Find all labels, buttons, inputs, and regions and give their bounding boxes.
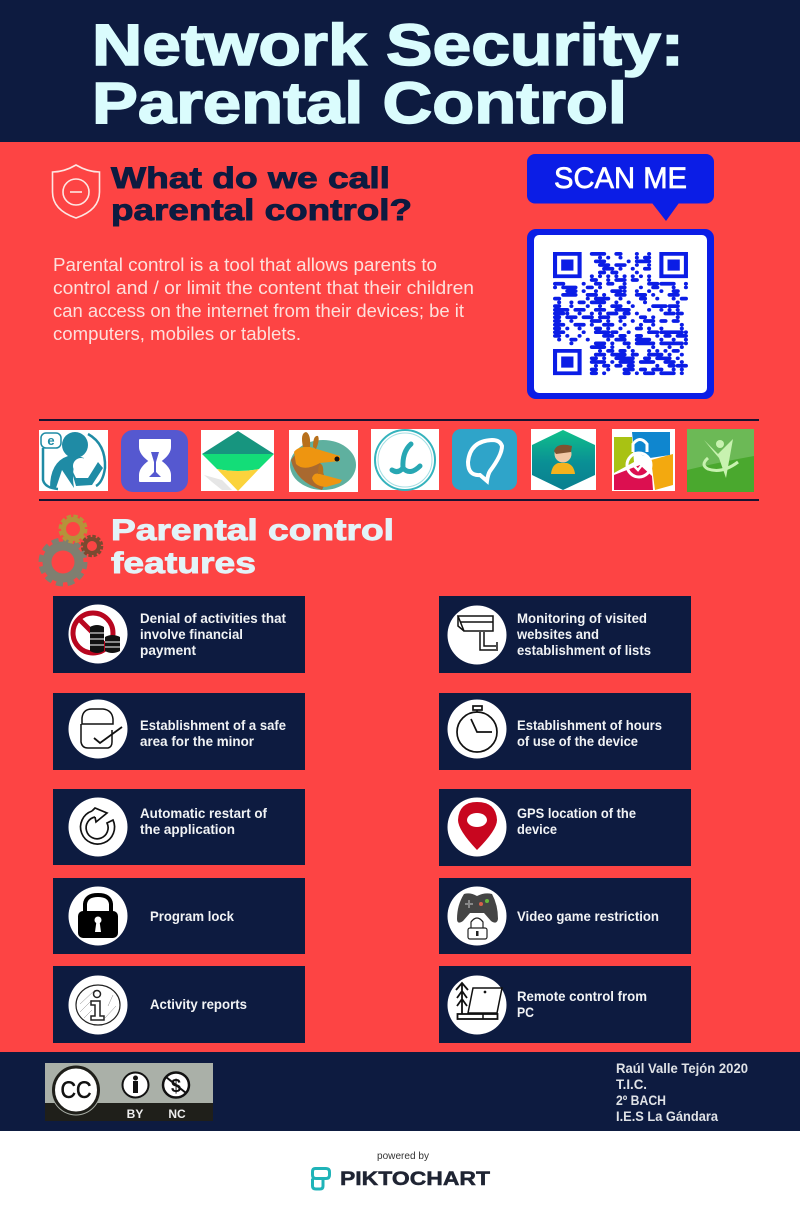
feature: automatic restart — [53, 789, 305, 865]
icon: restart arrow — [81, 808, 115, 844]
icon: Q app — [452, 429, 517, 490]
icon: hourglass app — [121, 430, 188, 492]
branding: powered by Piktochart: powered by — [377, 1151, 429, 1162]
badge: creative commons BY NC: $ — [171, 1076, 181, 1096]
feature: monitoring websites: Monitoring of visited — [517, 610, 647, 626]
heading: what do we call parental control: What do we call — [111, 162, 390, 195]
text block: definition: computers, mobiles or tablets. — [53, 324, 301, 344]
feature: remote control from PC — [439, 966, 691, 1043]
feature: denial of payment: Denial of activities that — [140, 610, 286, 626]
feature: GPS location: device — [517, 821, 557, 837]
feature: video game restriction — [439, 878, 691, 954]
icon: ESET parental control — [39, 430, 108, 491]
branding: powered by Piktochart: PIKTOCHART — [340, 1168, 490, 1190]
feature: monitoring websites — [439, 596, 691, 673]
text block: definition: control and / or limit the content that their children — [53, 278, 474, 298]
text block: definition: Parental control is a tool that allows parents to — [53, 255, 437, 275]
title: Parental Control — [92, 71, 627, 136]
feature: program lock — [53, 878, 305, 954]
icon: stopwatch — [457, 706, 497, 752]
text block: author credits — [616, 1060, 748, 1124]
icon: prohibited coins — [73, 613, 120, 653]
icon: gamepad with lock — [457, 893, 498, 939]
icon: ESET parental control: e — [47, 433, 55, 448]
icon: safe lock check — [81, 709, 122, 748]
panel: title header — [0, 0, 800, 142]
feature: denial of payment — [53, 596, 305, 673]
heading: parental control features: features — [111, 547, 256, 580]
feature: program lock: Program lock — [150, 908, 234, 924]
feature: video game restriction: Video game restriction — [517, 908, 659, 924]
feature: monitoring websites: establishment of lists — [517, 642, 651, 658]
badge: creative commons BY NC: BY — [127, 1107, 143, 1121]
QR code — [527, 229, 714, 399]
feature: hours of use: Establishment of hours — [517, 717, 662, 733]
badge: creative commons BY NC — [45, 1063, 213, 1121]
badge: creative commons BY NC: NC — [168, 1107, 186, 1121]
feature: GPS location — [439, 789, 691, 866]
feature: safe area: Establishment of a safe — [140, 717, 286, 733]
panel: red main background — [0, 142, 800, 1052]
text block: definition: can access on the internet from their devices; be it — [53, 301, 464, 321]
heading: parental control features: Parental control — [111, 514, 394, 547]
feature: monitoring websites: websites and — [516, 626, 599, 642]
feature: denial of payment: payment — [140, 642, 196, 658]
icon: security camera — [458, 616, 497, 651]
icon: map pin — [458, 802, 497, 850]
text block: author credits: I.E.S La Gándara — [616, 1108, 718, 1124]
icon: kangaroo app — [289, 430, 358, 492]
feature: activity reports: Activity reports — [150, 996, 247, 1012]
heading: parental control features — [111, 514, 394, 580]
icon: green diamond app — [201, 430, 274, 491]
icon: padlock — [78, 895, 118, 938]
icon: hexagon child app — [531, 429, 596, 490]
title: Network Security: — [92, 13, 684, 78]
text block: author credits: Raúl Valle Tejón 2020 — [616, 1060, 748, 1076]
panel: footer — [0, 1052, 800, 1131]
feature: remote control from PC: Remote control from — [517, 988, 647, 1004]
callout: scan me: SCAN ME — [554, 162, 687, 195]
title — [92, 13, 684, 136]
text block: author credits: T.I.C. — [616, 1076, 647, 1092]
icon: teal L app — [371, 429, 439, 490]
heading: what do we call parental control: parental control? — [111, 194, 412, 227]
text block: definition — [53, 255, 474, 344]
text block: author credits: 2º BACH — [616, 1092, 666, 1108]
feature: hours of use — [439, 693, 691, 770]
feature: safe area: area for the minor — [140, 733, 255, 749]
icon: colourful lock clock app — [612, 429, 675, 491]
icon: gears — [41, 516, 102, 584]
callout: scan me — [527, 154, 714, 221]
icon: laptop and tree — [456, 983, 502, 1019]
heading: what do we call parental control — [111, 162, 412, 227]
feature: remote control from PC: PC — [517, 1004, 534, 1020]
feature: safe area — [53, 693, 305, 770]
app icons row — [39, 429, 754, 492]
feature: automatic restart: the application — [140, 821, 235, 837]
branding: powered by Piktochart — [312, 1151, 490, 1190]
feature: denial of payment: involve financial — [140, 626, 243, 642]
feature: activity reports — [53, 966, 305, 1043]
icon: shield — [52, 165, 100, 218]
icon: sketched info — [76, 985, 120, 1025]
badge: creative commons BY NC: CC — [60, 1077, 92, 1104]
icon: green figure app — [687, 429, 754, 492]
feature: automatic restart: Automatic restart of — [140, 805, 267, 821]
feature: hours of use: of use of the device — [517, 733, 638, 749]
feature: GPS location: GPS location of the — [517, 805, 636, 821]
icon: Piktochart logo — [312, 1168, 330, 1189]
